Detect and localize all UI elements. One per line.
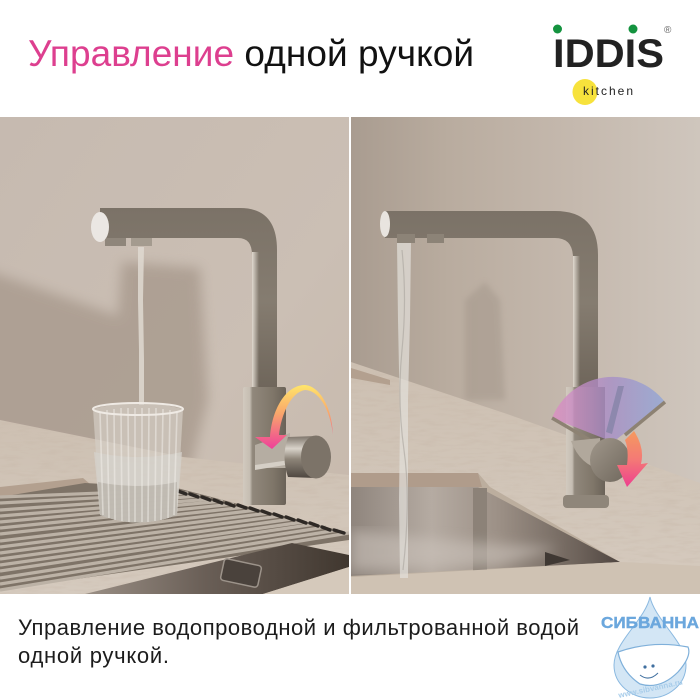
arrow: handle down bbox=[617, 431, 648, 487]
wall shadow bbox=[0, 262, 208, 470]
description text line 2: одной ручкой. bbox=[18, 643, 169, 668]
arrow: curved handle motion bbox=[255, 385, 333, 449]
drying mat bbox=[0, 483, 349, 590]
faucet bbox=[91, 208, 331, 505]
wall shadow bbox=[465, 282, 505, 400]
logo: IDDIS kitchen: kitchen bbox=[583, 84, 633, 98]
water stream bbox=[138, 247, 144, 405]
description text: Управление водопроводной и фильтрованной водой bbox=[18, 615, 579, 640]
panel: right photo, faucet with open stream bbox=[351, 117, 700, 594]
water stream bbox=[397, 243, 411, 578]
sink bbox=[85, 543, 349, 594]
logo: IDDIS kitchen: IDDIS bbox=[553, 32, 664, 76]
sink bbox=[351, 473, 700, 594]
countertop bbox=[0, 420, 349, 594]
watermark: Sibvanna bbox=[601, 597, 699, 700]
countertop bbox=[351, 362, 662, 564]
glass bbox=[93, 403, 183, 522]
fan: handle range bbox=[552, 377, 665, 482]
title: Управление одной ручкой bbox=[28, 33, 474, 74]
logo: IDDIS kitchen: ® bbox=[664, 25, 672, 36]
panel: left photo, faucet filling a glass bbox=[0, 117, 349, 594]
watermark: Sibvanna: www.sibvanna.ru bbox=[617, 678, 684, 700]
watermark: Sibvanna: СИБВАННА bbox=[601, 615, 699, 632]
faucet bbox=[380, 211, 609, 508]
logo: IDDIS kitchen bbox=[553, 24, 672, 105]
